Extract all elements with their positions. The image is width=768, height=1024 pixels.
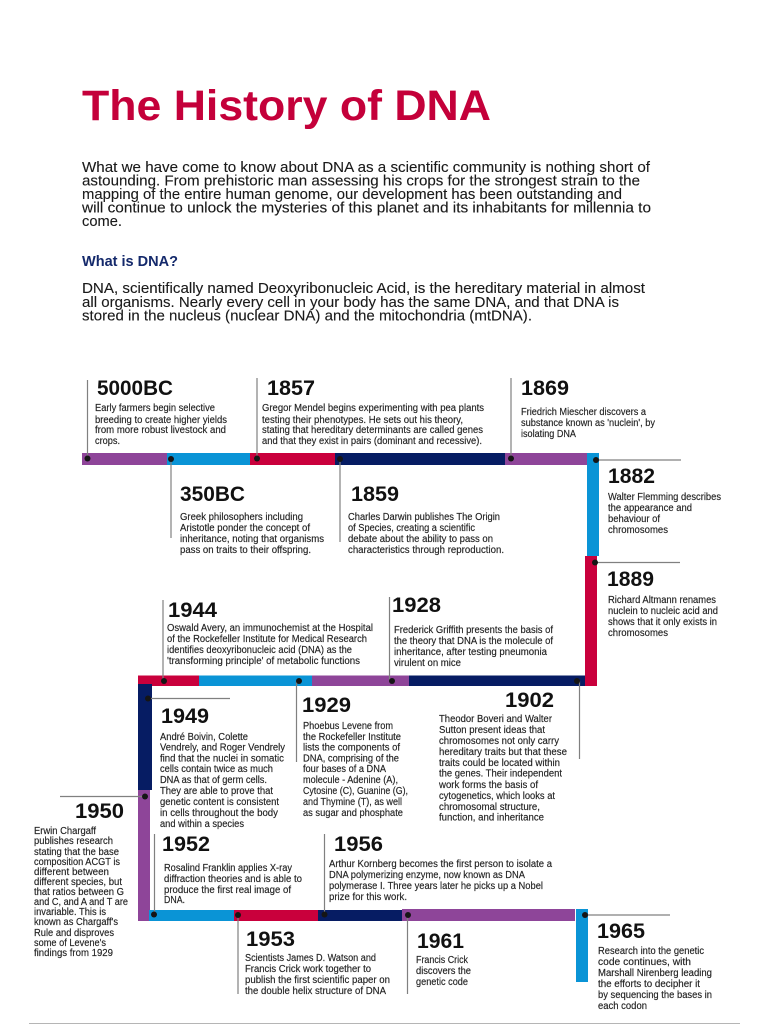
event: 1956 <box>322 832 552 918</box>
event: 1859 <box>337 456 504 556</box>
event: 1950: different between <box>34 867 109 878</box>
event: 1857: stating that hereditary determinants are called genes <box>262 425 483 436</box>
event: 1949: genetic content is consistent <box>160 797 279 808</box>
event: 1950: and C, and A and T are <box>34 897 128 908</box>
event: 1965 <box>582 912 712 1012</box>
intro paragraph: will continue to unlock the mysteries of this planet and its inhabitants for millennia to <box>81 200 651 216</box>
DNA definition paragraph: DNA, scientifically named Deoxyribonucleic Acid, is the hereditary material in almost <box>82 280 646 297</box>
event: 5000BC: Early farmers begin selective <box>95 403 215 414</box>
intro paragraph <box>81 159 651 230</box>
event: 1950: publishes research <box>34 836 113 847</box>
event: 1882: 1882 <box>608 464 655 488</box>
event: 1965: Marshall Nirenberg leading <box>598 968 712 979</box>
intro paragraph: mapping of the entire human genome, our development has been outstanding and <box>82 186 622 203</box>
event: 1944: identifies deoxyribonucleic acid (DNA) as the <box>167 645 352 656</box>
event: 1882: chromosomes <box>608 525 668 536</box>
event: 1902: hereditary traits but that these <box>439 747 567 758</box>
event: 1950: different species, but <box>34 877 122 888</box>
event: 1929: four bases of a DNA <box>303 764 386 775</box>
event: 1965: Research into the genetic <box>598 946 704 957</box>
event: 1869 <box>508 376 655 462</box>
event: 1928: inheritance, after testing pneumonia <box>394 647 547 658</box>
intro paragraph: come. <box>82 213 122 230</box>
event: 1956: 1956 <box>334 832 383 856</box>
event: 1950 <box>34 794 148 959</box>
event: 1965: 1965 <box>597 919 645 943</box>
event: 1869: 1869 <box>521 376 569 400</box>
event: 1902: Sutton present ideas that <box>439 725 545 736</box>
event: 1956: polymerase I. Three years later he picks up a Nobel <box>329 881 543 892</box>
intro paragraph: astounding. From prehistoric man assessing his crops for the strongest strain to the <box>82 172 640 190</box>
event: 1902 <box>438 678 580 824</box>
event: 1869: Friedrich Miescher discovers a <box>521 407 646 418</box>
event: 1950: stating that the base <box>34 847 119 858</box>
event: 1950: findings from 1929 <box>34 948 113 959</box>
event: 1949: André Boivin, Colette <box>160 732 248 743</box>
event: 1882: the appearance and <box>608 503 692 514</box>
event: 1902: chromosomal structure, <box>439 802 540 813</box>
title: The History of DNA <box>82 82 491 130</box>
event: 1859: debate about the ability to pass on <box>348 534 493 545</box>
event: 1889: Richard Altmann renames <box>608 595 716 606</box>
event: 1902: Theodor Boveri and Walter <box>439 714 553 725</box>
event: 1953: the double helix structure of DNA <box>245 986 386 997</box>
event: 1952 <box>151 832 302 918</box>
event: 350BC: inheritance, noting that organisms <box>180 534 324 545</box>
event: 1889: nuclein to nucleic acid and <box>608 606 718 617</box>
event: 1952: DNA. <box>164 895 185 906</box>
event: 1956: DNA polymerizing enzyme, now known as DNA <box>329 870 525 881</box>
event: 5000BC: 5000BC <box>97 376 173 400</box>
event: 1953: Scientists James D. Watson and <box>245 953 376 964</box>
event: 1929: and Thymine (T), as well <box>303 797 402 808</box>
event: 1902: traits could be located within <box>439 758 560 769</box>
event: 1929: as sugar and phosphate <box>303 808 403 819</box>
event: 1965: the efforts to decipher it <box>598 979 700 990</box>
event: 1929: lists the components of <box>303 742 400 754</box>
event: 1950: Rule and disproves <box>34 928 114 939</box>
event: 1928: 1928 <box>392 593 441 617</box>
DNA definition paragraph: stored in the nucleus (nuclear DNA) and the mitochondria (mtDNA). <box>82 308 532 324</box>
event: 1859: Charles Darwin publishes The Origin <box>348 512 500 523</box>
event: 1949: Vendrely, and Roger Vendrely <box>160 742 285 754</box>
event: 1928 <box>389 593 553 684</box>
event: 1950: some of Levene's <box>34 938 106 949</box>
event: 1944: 'transforming principle' of metabolic functions <box>167 656 360 667</box>
event: 1857: Gregor Mendel begins experimenting with pea plants <box>262 403 484 414</box>
event: 1965: each codon <box>598 1001 647 1012</box>
event: 350BC: Greek philosophers including <box>180 512 303 523</box>
event: 1952: diffraction theories and is able to <box>164 874 302 885</box>
event: 1949: in cells throughout the body <box>160 808 278 819</box>
event: 1953 <box>235 912 390 997</box>
event: 5000BC <box>84 376 227 462</box>
event: 1965: by sequencing the bases in <box>598 990 712 1001</box>
timeline track <box>82 453 599 982</box>
event: 1857: and that they exist in pairs (dominant and recessive). <box>262 436 482 447</box>
event: 1949: DNA as that of germ cells. <box>160 775 267 786</box>
event: 350BC <box>168 456 324 556</box>
event: 350BC: pass on traits to their offspring. <box>180 545 311 556</box>
DNA definition paragraph: all organisms. Nearly every cell in your body has the same DNA, and that DNA is <box>82 294 619 311</box>
event: 1961: discovers the <box>416 966 471 977</box>
event: 1944: of the Rockefeller Institute for Medical Research <box>167 634 367 645</box>
bottom rule <box>29 1022 740 1024</box>
event: 1928: virulent on mice <box>394 658 461 669</box>
event: 1857 <box>254 376 484 462</box>
event: 1961 <box>405 912 471 994</box>
event: 1953: publish the first scientific paper on <box>245 975 390 986</box>
event: 1949: 1949 <box>161 704 209 728</box>
event: 1950: invariable. This is <box>34 907 106 918</box>
event: 1953: 1953 <box>246 927 295 951</box>
event: 1902: function, and inheritance <box>439 812 544 824</box>
event: 1949 <box>145 696 285 830</box>
event: 1902: work forms the basis of <box>438 780 538 791</box>
event: 1859: 1859 <box>351 482 399 506</box>
event: 1928: the theory that DNA is the molecule of <box>394 636 553 647</box>
event: 5000BC: crops. <box>95 436 120 447</box>
event: 1949: and within a species <box>160 819 244 830</box>
event: 1949: They are able to prove that <box>160 786 273 797</box>
event: 1950: known as Chargaff's <box>34 917 118 928</box>
event: 1944: Oswald Avery, an immunochemist at the Hospital <box>167 623 373 634</box>
event: 1949: cells contain twice as much <box>160 764 273 775</box>
event: 1902: the genes. Their independent <box>439 768 562 780</box>
event: 1857: 1857 <box>267 376 315 400</box>
intro paragraph: What we have come to know about DNA as a scientific community is nothing short of <box>82 159 651 176</box>
event: 1952: Rosalind Franklin applies X-ray <box>164 863 292 874</box>
event: 1961: Francis Crick <box>416 955 469 966</box>
event: 1889: shows that it only exists in <box>608 617 717 628</box>
event: 1882: Walter Flemming describes <box>608 492 721 503</box>
event: 1956: Arthur Kornberg becomes the first person to isolate a <box>329 859 552 870</box>
event: 1950: composition ACGT is <box>34 857 120 868</box>
event: 1950: 1950 <box>75 799 124 823</box>
event: 1928: Frederick Griffith presents the basis of <box>394 625 553 636</box>
DNA definition paragraph <box>82 280 646 324</box>
event: 1961: genetic code <box>416 977 468 988</box>
event: 5000BC: from more robust livestock and <box>95 425 226 436</box>
event: 1950: that ratios between G <box>34 887 124 898</box>
event: 1859: characteristics through reproduction. <box>348 545 504 556</box>
event: 1965: code continues, with <box>598 957 691 968</box>
event: 1869: substance known as 'nuclein', by <box>521 418 655 429</box>
event: 1952: produce the first real image of <box>164 885 291 896</box>
event: 1944: 1944 <box>168 598 217 622</box>
event: 350BC: Aristotle ponder the concept of <box>180 523 310 534</box>
heading: What is DNA?: What is DNA? <box>82 254 178 270</box>
event: 1952: 1952 <box>162 832 210 856</box>
event: 1902: 1902 <box>505 688 554 712</box>
event: 1950: Erwin Chargaff <box>34 826 96 837</box>
event: 1944 <box>161 598 373 684</box>
event: 1929: Cytosine (C), Guanine (G), <box>303 786 408 797</box>
event: 1889: chromosomes <box>608 628 668 639</box>
event: 1882: behaviour of <box>608 514 660 525</box>
event: 1929: the Rockefeller Institute <box>303 732 401 743</box>
event: 350BC: 350BC <box>180 482 245 506</box>
event: 1961: 1961 <box>417 929 464 953</box>
event: 1869: isolating DNA <box>521 429 576 440</box>
event: 1929: 1929 <box>302 693 351 717</box>
event: 5000BC: breeding to create higher yields <box>95 415 227 426</box>
event: 1889: 1889 <box>607 567 654 591</box>
event: 1929: Phoebus Levene from <box>303 721 393 732</box>
event: 1882 <box>593 457 721 536</box>
event: 1902: chromosomes not only carry <box>439 736 559 747</box>
event: 1949: find that the nuclei in somatic <box>160 754 284 764</box>
event: 1929: DNA, comprising of the <box>303 754 399 764</box>
event: 1929 <box>296 678 408 819</box>
event: 1857: testing their phenotypes. He sets out his theory, <box>262 415 463 426</box>
event: 1902: cytogenetics, which looks at <box>439 791 555 802</box>
event: 1953: Francis Crick work together to <box>245 964 371 975</box>
event: 1889 <box>592 560 718 639</box>
event: 1859: of Species, creating a scientific <box>348 523 475 534</box>
event: 1929: molecule - Adenine (A), <box>303 775 398 786</box>
event: 1956: prize for this work. <box>329 892 407 903</box>
